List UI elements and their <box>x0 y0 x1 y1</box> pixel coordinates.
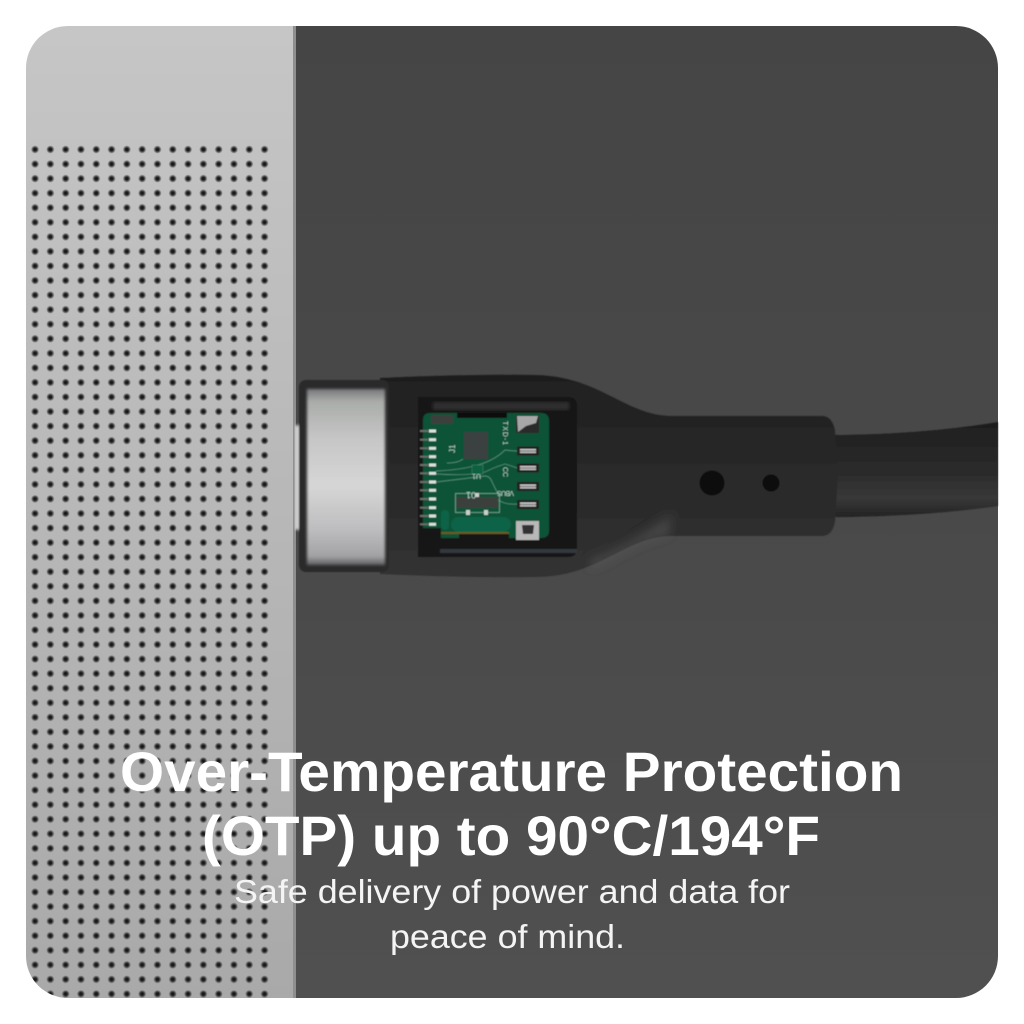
contact pad 2 <box>517 464 539 472</box>
top left component <box>431 415 453 424</box>
label data pin: TXD-1 <box>501 421 508 445</box>
subtitle line 1: Safe delivery of power and data for <box>234 873 790 910</box>
overmold highlight <box>590 515 672 570</box>
cable connector overmold <box>380 375 838 577</box>
bottom large pad <box>516 521 539 540</box>
title <box>120 740 903 867</box>
label CC: CC <box>501 467 508 477</box>
laptop edge shadow <box>293 26 296 998</box>
right metal pads <box>516 415 539 540</box>
panel: dark laptop surface <box>296 26 998 998</box>
main chip <box>464 432 488 459</box>
cutaway recess <box>418 397 577 557</box>
label U1: U1 <box>472 472 481 479</box>
subtitle line 2: peace of mind. <box>390 918 625 955</box>
cable illustration <box>295 375 998 577</box>
left contact pins <box>420 430 428 525</box>
top large pad <box>516 415 539 433</box>
top large pad shine <box>517 416 538 432</box>
subtitle <box>234 873 790 955</box>
title line 1: Over-Temperature Protection <box>120 740 903 803</box>
title line 2: (OTP) up to 90°C/194°F <box>202 804 820 867</box>
left white solder pads <box>429 430 436 526</box>
component leads <box>466 493 488 515</box>
silver connector shell <box>307 389 385 565</box>
contact pad 1 shine <box>520 449 536 453</box>
cable hole small <box>762 474 780 492</box>
cable cord <box>830 422 998 517</box>
contact pad 3 shine <box>520 484 536 488</box>
contact pad 4 <box>517 500 539 509</box>
cable hole large <box>700 470 724 496</box>
bottom large pad shadow <box>522 525 534 534</box>
PCB top notch <box>457 413 507 418</box>
left green oval pad <box>441 510 449 530</box>
bottom green oval pad <box>451 517 511 532</box>
circuit traces <box>436 450 517 504</box>
contact pad 4 shine <box>520 502 536 506</box>
bottom component <box>456 497 498 508</box>
connector tip highlight <box>295 425 299 530</box>
label J1: J1 <box>448 444 457 453</box>
recess lower lip <box>440 549 577 553</box>
label 01: 01 <box>466 490 476 500</box>
panel: silver laptop side <box>26 26 296 998</box>
green PCB <box>423 413 549 538</box>
recess inner wall <box>433 402 569 410</box>
label VBUS: VBUS <box>497 489 514 496</box>
circuit board <box>420 413 549 540</box>
PCB bottom notch <box>459 534 509 539</box>
trace component <box>472 465 483 474</box>
contact pad 2 shine <box>520 466 536 470</box>
connector dark collar <box>299 380 389 572</box>
PCB gold edge <box>441 532 509 534</box>
silkscreen labels <box>448 421 514 500</box>
contact pad 3 <box>517 482 539 491</box>
bottom component outline <box>456 494 500 512</box>
perforated speaker grille <box>27 142 272 1001</box>
contact pad 1 <box>517 446 539 456</box>
